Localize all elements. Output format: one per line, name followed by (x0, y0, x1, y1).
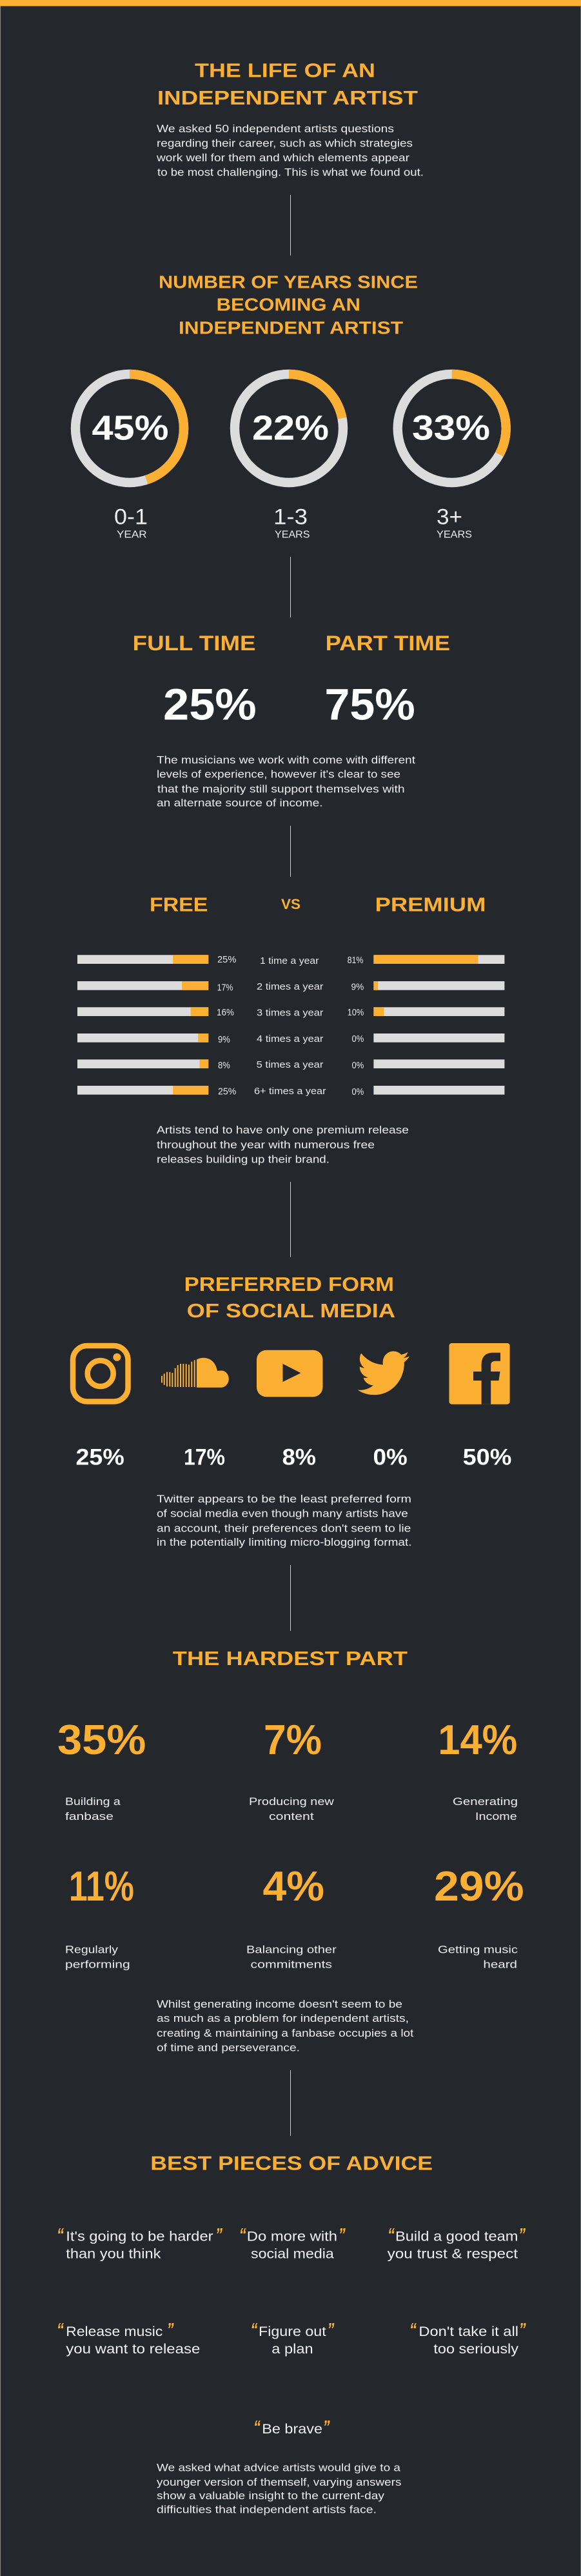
donut chart: 22% 1-3 years (235, 374, 343, 540)
free vs premium text (157, 1124, 409, 1165)
quote: build a good team: Build a good team (395, 2230, 518, 2244)
stat: balancing other commitments: commitments (250, 1959, 332, 1971)
stat: balancing other commitments: 4% (263, 1862, 324, 1910)
quote: harder than you think: “ (57, 2224, 64, 2244)
hardest part text (157, 1998, 414, 2054)
stat: generating income (438, 1716, 518, 1822)
quote: figure out a plan: ” (328, 2319, 334, 2339)
quote: release music: you want to release (66, 2342, 200, 2357)
social media percentages (76, 1445, 511, 1470)
advice text: show a valuable insight to the current-day (157, 2490, 385, 2502)
social media text: Twitter appears to be the least preferred form (157, 1493, 411, 1505)
intro text: work well for them and which elements appear (156, 152, 409, 164)
stat: generating income: Income (475, 1810, 517, 1822)
stat: getting music heard: heard (483, 1959, 517, 1971)
quote: release music (57, 2319, 200, 2357)
social media text: an account, their preferences don't seem to lie (157, 1523, 411, 1534)
quote: don't take it all too seriously: Don't take it all (419, 2324, 518, 2339)
icon: youtube (257, 1350, 322, 1397)
quote: build a good team: “ (388, 2224, 395, 2244)
bar chart: free releases: 9% (218, 1035, 230, 1045)
stat: generating income: Generating (453, 1795, 518, 1808)
donut chart: 33% 3+ years: 3+ (437, 504, 462, 529)
advice text: We asked what advice artists would give to a (157, 2462, 401, 2474)
frequency labels (254, 956, 326, 1097)
full/part time text: The musicians we work with come with different (157, 754, 415, 766)
donut chart: 45% 0-1 year: 45% (92, 408, 169, 447)
bar chart: free releases: 16% (217, 1008, 234, 1018)
donut chart: 45% 0-1 year: 0-1 (114, 504, 148, 529)
stat: getting music heard (434, 1862, 524, 1971)
donut chart: 45% 0-1 year (75, 374, 184, 540)
part time stat: 75% (324, 679, 415, 729)
full time stat (133, 632, 257, 729)
quote: don't take it all too seriously: “ (409, 2319, 417, 2339)
stat: producing new content (249, 1716, 335, 1822)
quote: be brave: “ (253, 2417, 261, 2437)
social media percentages: 8% (282, 1445, 316, 1470)
heading: the hardest part: THE HARDEST PART (173, 1647, 408, 1670)
heading: years since becoming independent (159, 272, 418, 337)
part time stat: PART TIME (326, 632, 450, 655)
quote: figure out a plan: a plan (271, 2342, 313, 2357)
quote: don't take it all too seriously: too seriously (433, 2342, 519, 2357)
quote: be brave (253, 2417, 330, 2437)
donut chart: 33% 3+ years (398, 374, 506, 540)
frequency labels: 3 times a year (257, 1008, 324, 1019)
icon: instagram (73, 1346, 128, 1401)
heading: preferred social media: OF SOCIAL MEDIA (187, 1299, 395, 1322)
stat: building a fanbase: fanbase (65, 1810, 113, 1822)
intro text (156, 123, 424, 179)
heading: years since becoming independent: BECOMING AN (217, 295, 360, 315)
quote: do more with social media: ” (339, 2224, 346, 2244)
advice text: difficulties that independent artists face. (157, 2503, 377, 2515)
quote: harder than you think (57, 2224, 222, 2262)
quote: release music: “ (57, 2319, 64, 2339)
full time stat: 25% (163, 679, 257, 729)
social media percentages: 17% (184, 1445, 225, 1470)
quote: harder than you think: than you think (66, 2246, 161, 2262)
icon: facebook (449, 1343, 510, 1404)
free vs premium heading: PREMIUM (375, 893, 486, 915)
bar chart: premium releases: 81% (348, 955, 363, 966)
icon: soundcloud (161, 1358, 229, 1388)
heading: years since becoming independent: NUMBER OF YEARS SINCE (159, 272, 418, 292)
stat: building a fanbase: 35% (57, 1716, 146, 1763)
quote: don't take it all too seriously (409, 2319, 526, 2357)
stat: building a fanbase (57, 1716, 146, 1822)
free vs premium text: releases building up their brand. (157, 1153, 330, 1165)
quote: do more with social media: social media (251, 2246, 334, 2262)
quote: harder than you think: ” (215, 2224, 222, 2244)
frequency labels: 2 times a year (257, 982, 324, 992)
bar chart: premium releases: 0% (352, 1061, 364, 1071)
bar chart: free releases: 8% (218, 1061, 230, 1071)
stat: regularly performing: performing (65, 1959, 130, 1971)
donut chart: 22% 1-3 years: YEARS (275, 529, 310, 540)
quote: figure out a plan: Figure out (259, 2324, 326, 2339)
stat: regularly performing: Regularly (65, 1944, 119, 1956)
free vs premium text: Artists tend to have only one premium release (157, 1124, 409, 1136)
hardest part text: Whilst generating income doesn't seem to be (157, 1998, 402, 2010)
quote: figure out a plan: “ (250, 2319, 258, 2339)
social media percentages: 0% (373, 1445, 408, 1470)
quote: do more with social media: “ (239, 2224, 246, 2244)
part time stat (324, 632, 450, 729)
bar chart: premium releases: 9% (351, 983, 364, 993)
stat: generating income: 14% (438, 1716, 517, 1763)
bar chart: free releases: 17% (217, 983, 233, 993)
full/part time text: an alternate source of income. (157, 797, 323, 809)
donut chart: 33% 3+ years: YEARS (437, 529, 472, 540)
stat: balancing other commitments (246, 1862, 337, 1971)
title: INDEPENDENT ARTIST (157, 86, 418, 109)
intro text: We asked 50 independent artists questions (157, 123, 394, 135)
quote: do more with social media (239, 2224, 346, 2262)
free vs premium heading (150, 893, 486, 915)
quote: build a good team: you trust & respect (388, 2246, 518, 2262)
bar chart: free releases: 25% (217, 955, 236, 965)
heading: best pieces of advice: BEST PIECES OF ADVICE (150, 2152, 433, 2174)
stat: producing new content: content (269, 1810, 314, 1822)
stat: regularly performing: 11% (69, 1862, 134, 1910)
intro text: to be most challenging. This is what we found out. (157, 166, 424, 179)
icon: twitter (358, 1351, 409, 1395)
free vs premium text: throughout the year with numerous free (157, 1139, 375, 1151)
heading: preferred social media: PREFERRED FORM (184, 1273, 394, 1295)
stat: getting music heard: Getting music (438, 1944, 518, 1956)
bar chart: free releases (77, 955, 236, 1097)
stat: producing new content: Producing new (249, 1795, 335, 1808)
frequency labels: 5 times a year (257, 1060, 324, 1070)
bar chart: free releases: 25% (218, 1087, 236, 1097)
advice text: younger version of themself, varying answers (157, 2476, 401, 2488)
donut chart: 33% 3+ years: 33% (412, 408, 490, 447)
stat: regularly performing (65, 1862, 134, 1971)
frequency labels: 1 time a year (260, 956, 319, 966)
full/part time text: that the majority still support themselves with (157, 783, 405, 795)
quote: be brave: Be brave (262, 2422, 322, 2437)
quote: build a good team: ” (518, 2224, 526, 2244)
donut chart: 22% 1-3 years: 1-3 (273, 504, 308, 529)
hardest part text: creating & maintaining a fanbase occupies a lot (157, 2027, 414, 2039)
quote: don't take it all too seriously: ” (519, 2319, 526, 2339)
full/part time text: levels of experience, however it's clear to see (157, 768, 400, 780)
quote: harder than you think: It's going to be harder (66, 2230, 213, 2244)
quote: do more with social media: Do more with (247, 2230, 337, 2244)
hardest part text: of time and perseverance. (157, 2041, 300, 2054)
stat: building a fanbase: Building a (65, 1795, 121, 1808)
title: THE LIFE OF AN (195, 59, 375, 82)
full/part time text (157, 754, 415, 809)
hardest part text: as much as a problem for independent artists, (157, 2012, 409, 2024)
bar chart: premium releases: 10% (348, 1008, 364, 1018)
frequency labels: 6+ times a year (254, 1086, 326, 1097)
advice text (157, 2462, 401, 2515)
donut chart: 45% 0-1 year: YEAR (117, 529, 147, 540)
stat: producing new content: 7% (264, 1716, 322, 1763)
quote: build a good team (388, 2224, 526, 2262)
title (157, 59, 418, 109)
stat: getting music heard: 29% (434, 1862, 524, 1910)
social media percentages: 50% (463, 1445, 511, 1470)
frequency labels: 4 times a year (257, 1034, 324, 1044)
bar chart: premium releases: 0% (352, 1087, 364, 1097)
social media text (157, 1493, 411, 1548)
full time stat: FULL TIME (133, 632, 255, 655)
quote: be brave: ” (323, 2417, 330, 2437)
free vs premium heading: FREE (150, 893, 208, 915)
intro text: regarding their career, such as which strategies (157, 137, 413, 150)
quote: figure out a plan (250, 2319, 334, 2357)
bar chart: premium releases: 0% (352, 1034, 364, 1044)
social media text: in the potentially limiting micro-blogging format. (157, 1536, 411, 1548)
quote: release music: Release music (66, 2324, 162, 2339)
quote: release music: ” (167, 2319, 174, 2339)
heading: preferred social media (184, 1273, 395, 1322)
heading: years since becoming independent: INDEPENDENT ARTIST (179, 317, 403, 337)
bar chart: premium releases (348, 955, 504, 1097)
social media text: of social media even though many artists have (157, 1507, 408, 1520)
social media percentages: 25% (76, 1445, 124, 1470)
donut chart: 22% 1-3 years: 22% (252, 408, 329, 447)
top accent bar (0, 0, 581, 6)
free vs premium heading: VS (281, 896, 300, 912)
stat: balancing other commitments: Balancing other (246, 1944, 337, 1956)
